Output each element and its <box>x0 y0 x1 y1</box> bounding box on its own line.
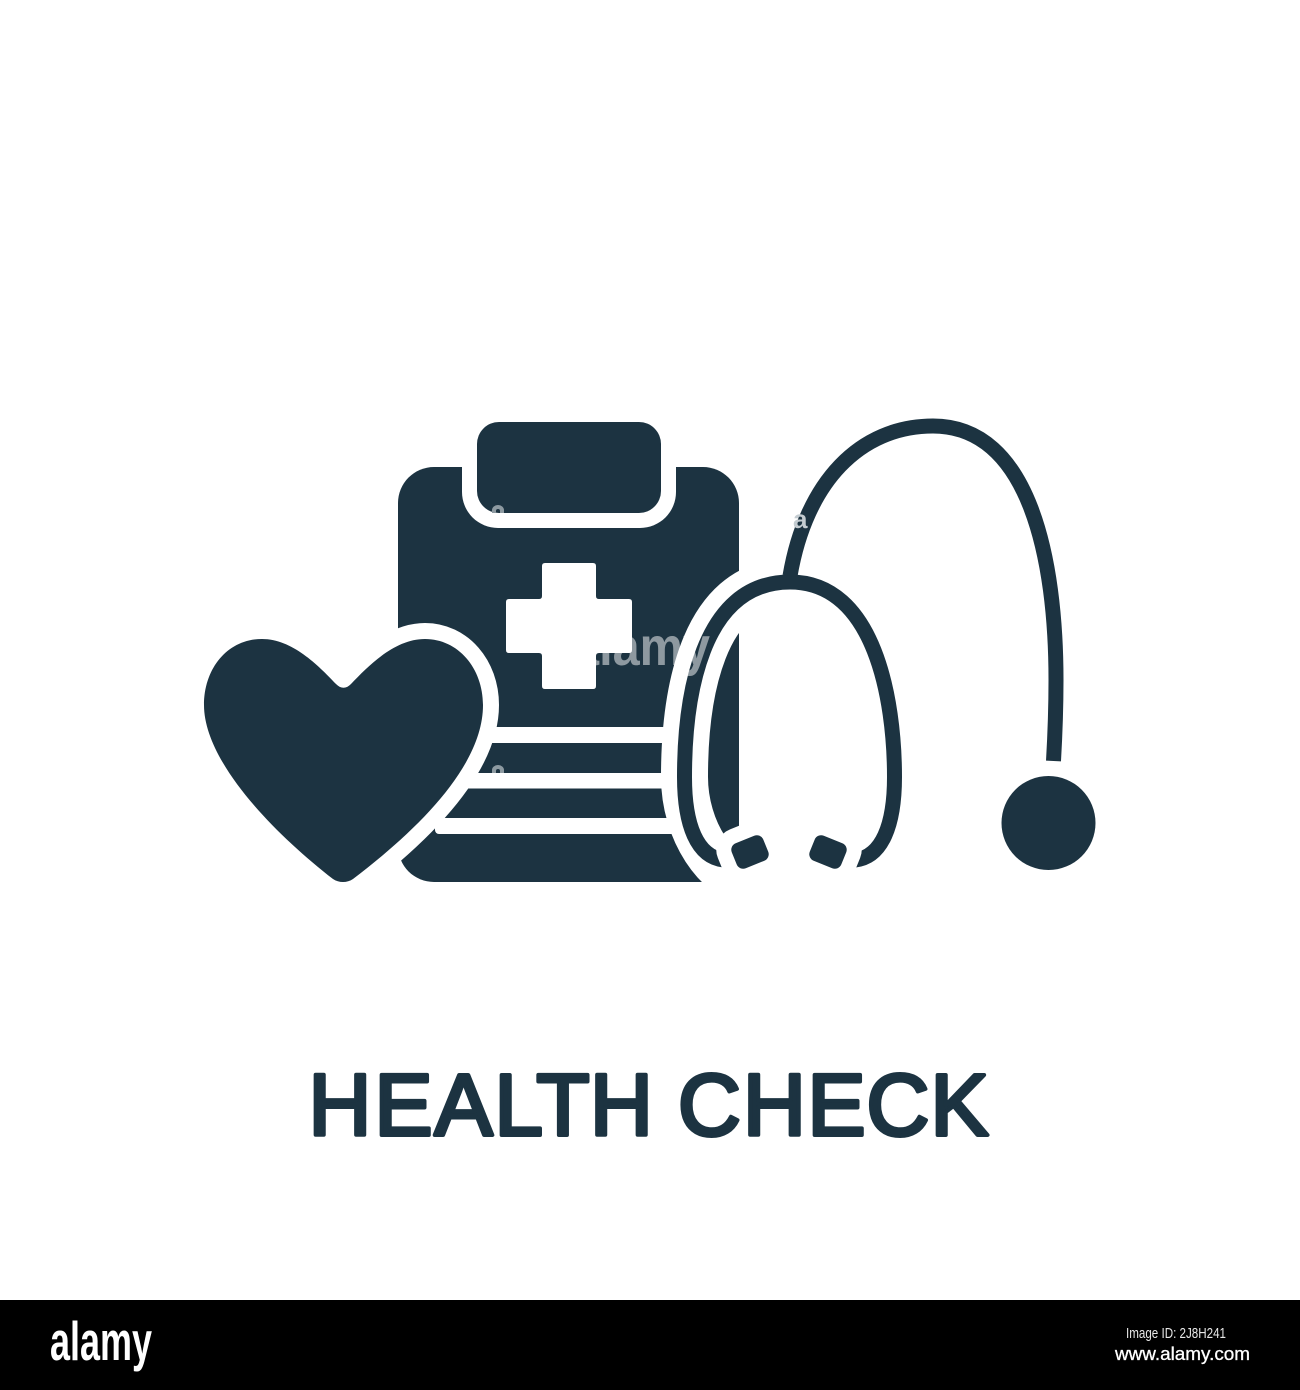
watermark: alamy <box>572 617 710 677</box>
watermark fragment near tube: a <box>793 504 808 534</box>
icon: health check illustration <box>204 400 1096 886</box>
watermark fragment on clip <box>492 505 504 513</box>
icon: heart <box>204 639 483 882</box>
website: www.alamy.com <box>1114 1344 1250 1364</box>
icon: left earpiece <box>729 833 771 871</box>
image id: Image ID: 2J8H241 <box>1126 1325 1226 1342</box>
title: HEALTH CHECK <box>308 1057 989 1154</box>
icon: right earpiece <box>807 833 849 871</box>
footer bar <box>0 1300 1300 1390</box>
watermark fragment on line <box>492 765 504 773</box>
icon: stethoscope <box>684 426 1096 886</box>
icon: medical clipboard <box>398 400 739 882</box>
footer logo: alamy <box>50 1310 152 1372</box>
